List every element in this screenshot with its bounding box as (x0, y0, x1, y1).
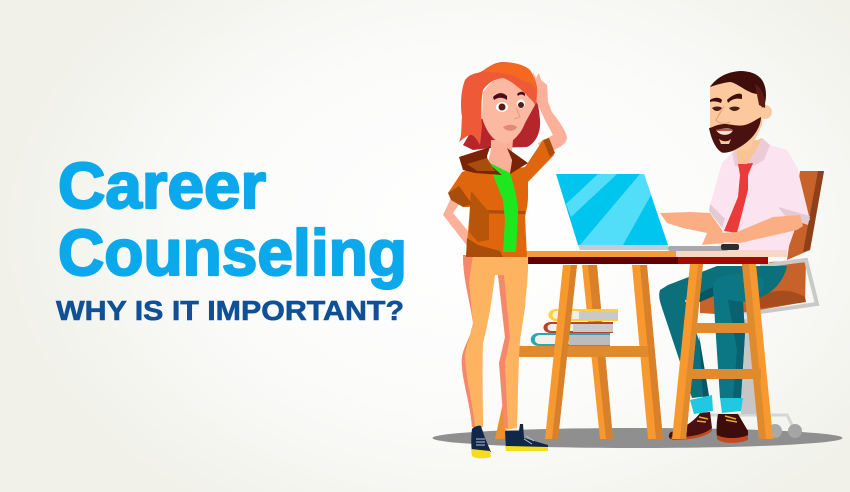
title: Career Counseling: Counseling (58, 216, 407, 289)
table front left leg (545, 265, 577, 439)
man's head (709, 71, 772, 164)
far leg (659, 266, 787, 398)
office chair (700, 171, 824, 438)
woman's lower arm and hand (443, 196, 500, 257)
woman (443, 62, 567, 458)
woman's hood (459, 147, 502, 175)
table top (526, 250, 787, 264)
near leg (713, 273, 764, 398)
title: Career Counseling: Career (58, 149, 266, 222)
table right legs (672, 264, 773, 439)
woman's facial features (493, 92, 525, 100)
beard (709, 117, 761, 153)
jacket sleeve cuffs (448, 138, 555, 207)
woman's front hair (459, 62, 537, 145)
man's legs (659, 266, 787, 443)
trouser cuffs (690, 395, 743, 414)
man's arms and keyboard (660, 212, 803, 251)
man's shoes (669, 412, 712, 439)
woman's leggings (462, 255, 528, 430)
woman's neck (488, 140, 513, 173)
laptop (556, 174, 668, 250)
woman's shoes (471, 426, 491, 453)
stack of books (531, 309, 618, 346)
man's shirt and tie (709, 138, 810, 252)
hair (710, 71, 766, 108)
title: Career Counseling (58, 149, 407, 289)
woman's back hair (463, 92, 540, 150)
woman's jacket (448, 140, 554, 257)
eyebrows and eyes (710, 94, 742, 103)
woman's raised arm (531, 72, 567, 152)
table crossbar (518, 346, 648, 357)
subtitle: why is it important: WHY IS IT IMPORTANT? (56, 295, 404, 326)
woman's green top (488, 162, 518, 252)
floor shadow (432, 428, 842, 448)
woman's face (482, 78, 535, 143)
jacket shading (466, 192, 525, 257)
table rear legs (495, 265, 663, 439)
tie (724, 163, 753, 233)
